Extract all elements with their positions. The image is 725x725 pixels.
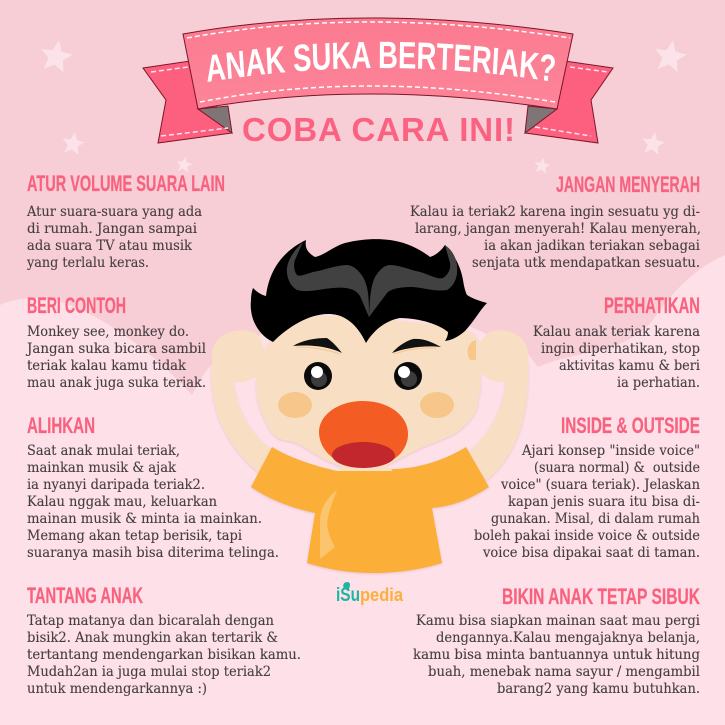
shirt highlight xyxy=(320,490,337,559)
panel: alihkan: Kalau nggak mau, keluarkan xyxy=(27,494,217,510)
panel: inside and outside: Ajari konsep "inside voice" xyxy=(521,443,700,459)
panel: inside and outside: kapan jenis suara itu bisa di- xyxy=(508,494,700,510)
logo: isupedia: iSu xyxy=(336,585,360,606)
subtitle: COBA CARA INI! xyxy=(242,111,515,148)
cheeks xyxy=(278,392,454,418)
panel: tantang anak: Mudah2an ia juga mulai stop teriak2 xyxy=(27,664,271,680)
hands and ears xyxy=(212,330,528,382)
panel: bikin anak tetap sibuk xyxy=(413,584,701,697)
panel: jangan menyerah: Kalau ia teriak2 karena ingin sesuatu yg di- xyxy=(410,204,700,220)
panel: inside and outside xyxy=(474,413,700,561)
panel: inside and outside: gunakan. Misal, di dalam rumah xyxy=(491,511,700,527)
panel: beri contoh: mau anak juga suka teriak. xyxy=(27,375,206,391)
panel: atur volume suara lain: yang terlalu keras. xyxy=(26,255,149,271)
panel: alihkan: Memang akan tetap berisik, tapi xyxy=(27,528,243,544)
panel: beri contoh: Jangan suka bicara sambil xyxy=(25,341,206,357)
panel: inside and outside: voice bisa dipakai saat di taman. xyxy=(482,545,700,561)
panel: atur volume suara lain: ATUR VOLUME SUARA LAIN xyxy=(27,171,225,196)
title: anak suka berteriak: ANAK SUKA BERTERIAK? xyxy=(207,42,555,82)
neck xyxy=(336,464,393,471)
panel: bikin anak tetap sibuk: Kamu bisa siapkan mainan saat mau pergi xyxy=(416,613,701,629)
panel: beri contoh: Monkey see, monkey do. xyxy=(27,324,189,340)
panel: jangan menyerah: larang, jangan menyerah! Kalau menyerah, xyxy=(415,221,701,237)
panel: perhatikan: aktivitas kamu & beri xyxy=(559,358,701,374)
character: shouting child xyxy=(211,239,528,573)
panel: tantang anak: untuk mendengarkannya :) xyxy=(27,681,207,697)
decorative stars xyxy=(38,37,689,174)
panel: atur volume suara lain: di rumah. Jangan sampai xyxy=(27,221,198,237)
panel: tantang anak: bisik2. Anak mungkin akan tertarik & xyxy=(27,630,278,646)
panel: alihkan: ia nyanyi daripada teriak2. xyxy=(27,477,205,493)
panel: beri contoh: BERI CONTOH xyxy=(27,293,126,318)
panel: perhatikan xyxy=(533,293,701,391)
panel: inside and outside: voice" (suara teriak). Jelaskan xyxy=(500,477,700,493)
panel: jangan menyerah xyxy=(410,172,701,271)
mouth xyxy=(319,401,408,468)
panel: tantang anak xyxy=(27,583,301,697)
panel: alihkan: suaranya masih bisa diterima telinga. xyxy=(27,545,279,561)
logo: isupedia xyxy=(336,582,404,606)
panel: tantang anak: Tatap matanya dan bicaralah dengan xyxy=(27,613,274,629)
hair highlights xyxy=(287,242,457,317)
panel: perhatikan: Kalau anak teriak karena xyxy=(533,324,700,340)
panel: alihkan: mainkan musik & ajak xyxy=(27,460,177,476)
panel: atur volume suara lain xyxy=(26,171,225,271)
title ribbon banner xyxy=(142,18,614,144)
arms xyxy=(211,360,528,480)
panel: jangan menyerah: ia akan jadikan teriakan sebagai xyxy=(484,238,701,254)
panel: atur volume suara lain: ada suara TV atau musik xyxy=(27,238,193,254)
panel: perhatikan: ia perhatian. xyxy=(617,375,700,391)
panel: bikin anak tetap sibuk: buah, menebak nama sayur / mengambil xyxy=(428,664,700,680)
panel: alihkan: mainan musik & minta ia mainkan. xyxy=(27,511,262,527)
shirt xyxy=(251,447,489,573)
hair xyxy=(251,239,487,343)
panel: bikin anak tetap sibuk: kamu bisa minta bantuannya untuk hitung xyxy=(413,647,700,663)
panel: perhatikan: ingin diperhatikan, stop xyxy=(541,341,700,357)
panel: alihkan: Saat anak mulai teriak, xyxy=(27,443,180,459)
panel: alihkan: ALIHKAN xyxy=(27,413,95,438)
panel: beri contoh xyxy=(25,293,206,391)
panel: inside and outside: (suara normal) & outside xyxy=(534,460,700,476)
panel: atur volume suara lain: Atur suara-suara yang ada xyxy=(26,204,202,220)
panel: alihkan xyxy=(27,413,279,561)
panel: tantang anak: TANTANG ANAK xyxy=(27,583,143,608)
eyes xyxy=(304,362,422,390)
panel: bikin anak tetap sibuk: dengannya.Kalau mengajaknya belanja, xyxy=(436,630,700,646)
panel: jangan menyerah: senjata utk mendapatkan sesuatu. xyxy=(472,255,700,271)
panel: beri contoh: teriak kalau kamu tidak xyxy=(27,358,187,374)
head xyxy=(256,315,481,470)
panel: inside and outside: boleh pakai inside voice & outside xyxy=(474,528,700,544)
panel: tantang anak: tertantang mendengarkan bisikan kamu. xyxy=(27,647,301,663)
panel: bikin anak tetap sibuk: barang2 yang kamu butuhkan. xyxy=(497,681,700,697)
eyebrows xyxy=(293,338,441,354)
logo: isupedia: pedia xyxy=(360,585,404,605)
